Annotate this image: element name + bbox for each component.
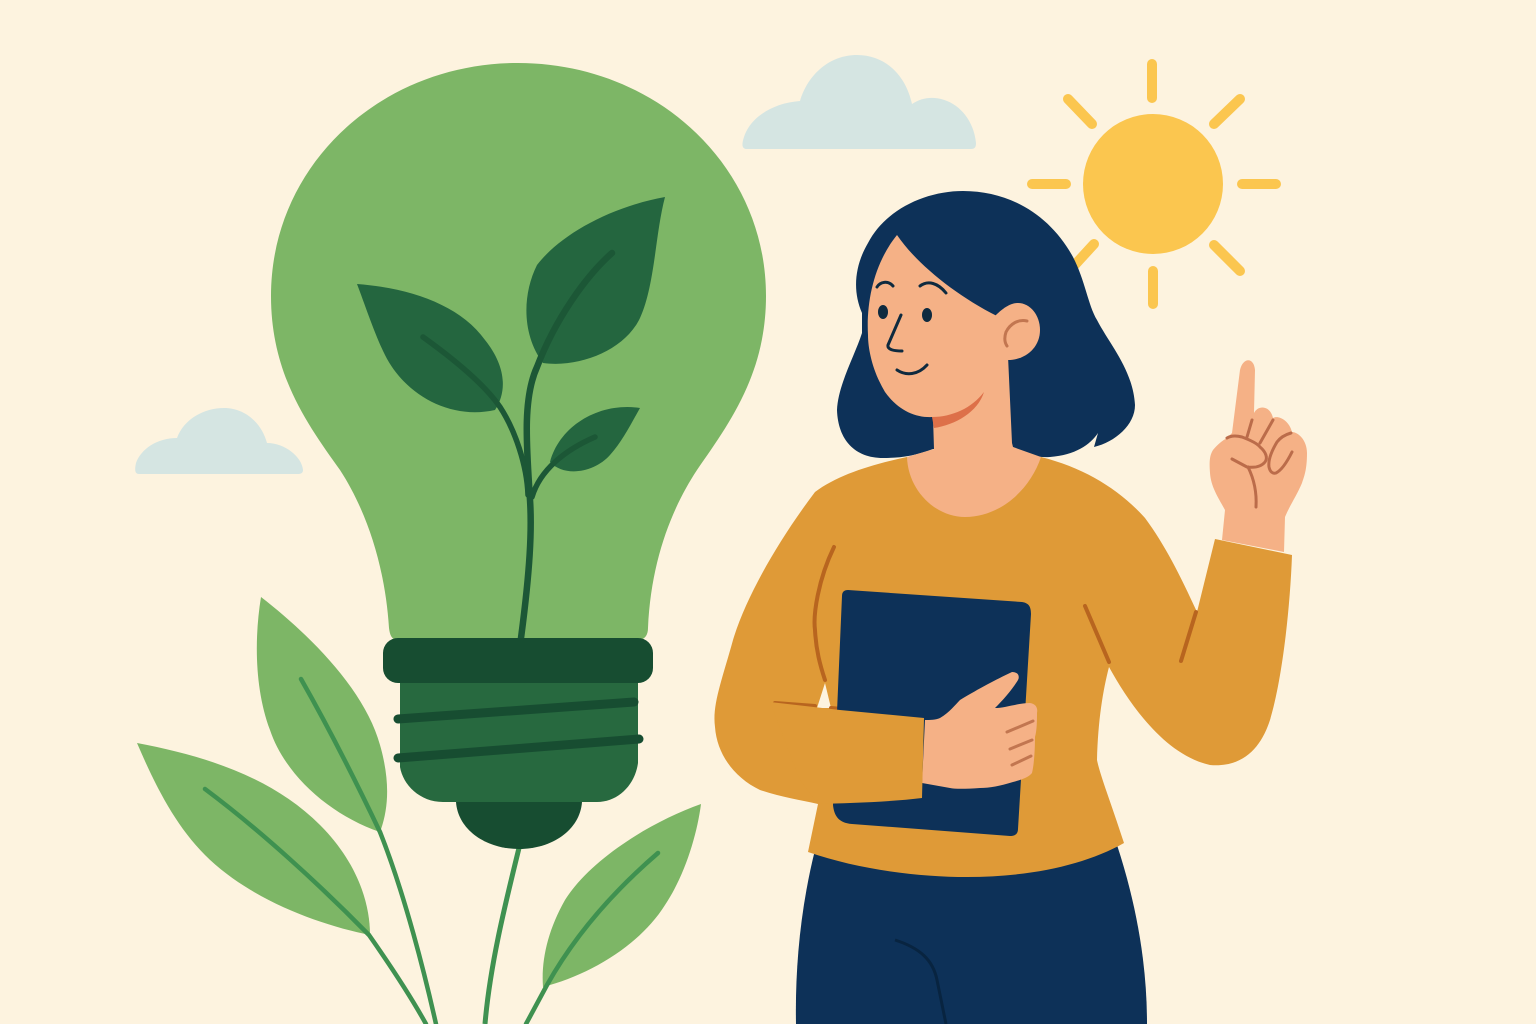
sweater seams [775,547,1196,709]
cloud: top [742,55,976,149]
nose [888,315,902,351]
leaf: far left [137,743,426,1024]
woman [714,191,1307,1024]
tablet [833,590,1031,836]
stems [423,253,612,638]
cloud: left [135,408,303,474]
leaf: tall left [257,597,436,1024]
raised hand [1210,360,1307,552]
lower left foliage [137,597,701,1024]
sweater body [714,457,1292,877]
trousers [796,845,1147,1024]
bulb threads [398,702,639,758]
center stem [485,848,519,1024]
head and neck [868,235,1041,517]
light bulb [271,63,766,849]
plant [357,197,665,638]
mouth [897,365,927,374]
sleeve cuff over tablet [770,702,924,804]
leaf: upper left [357,284,503,412]
ear [995,303,1040,360]
hair [837,191,1135,458]
gap between arm and torso [817,683,831,708]
icon: sun [1032,64,1276,304]
bulb glass [271,63,766,640]
leaf: upper right [526,197,665,364]
leaf: right [526,804,701,1024]
bulb tip [456,802,582,849]
eyes and brows [878,305,888,319]
hand on tablet [922,672,1037,789]
chin shadow [932,392,984,428]
bulb collar [383,638,653,683]
leaf: small right [550,407,640,471]
bulb screw base [400,680,638,802]
